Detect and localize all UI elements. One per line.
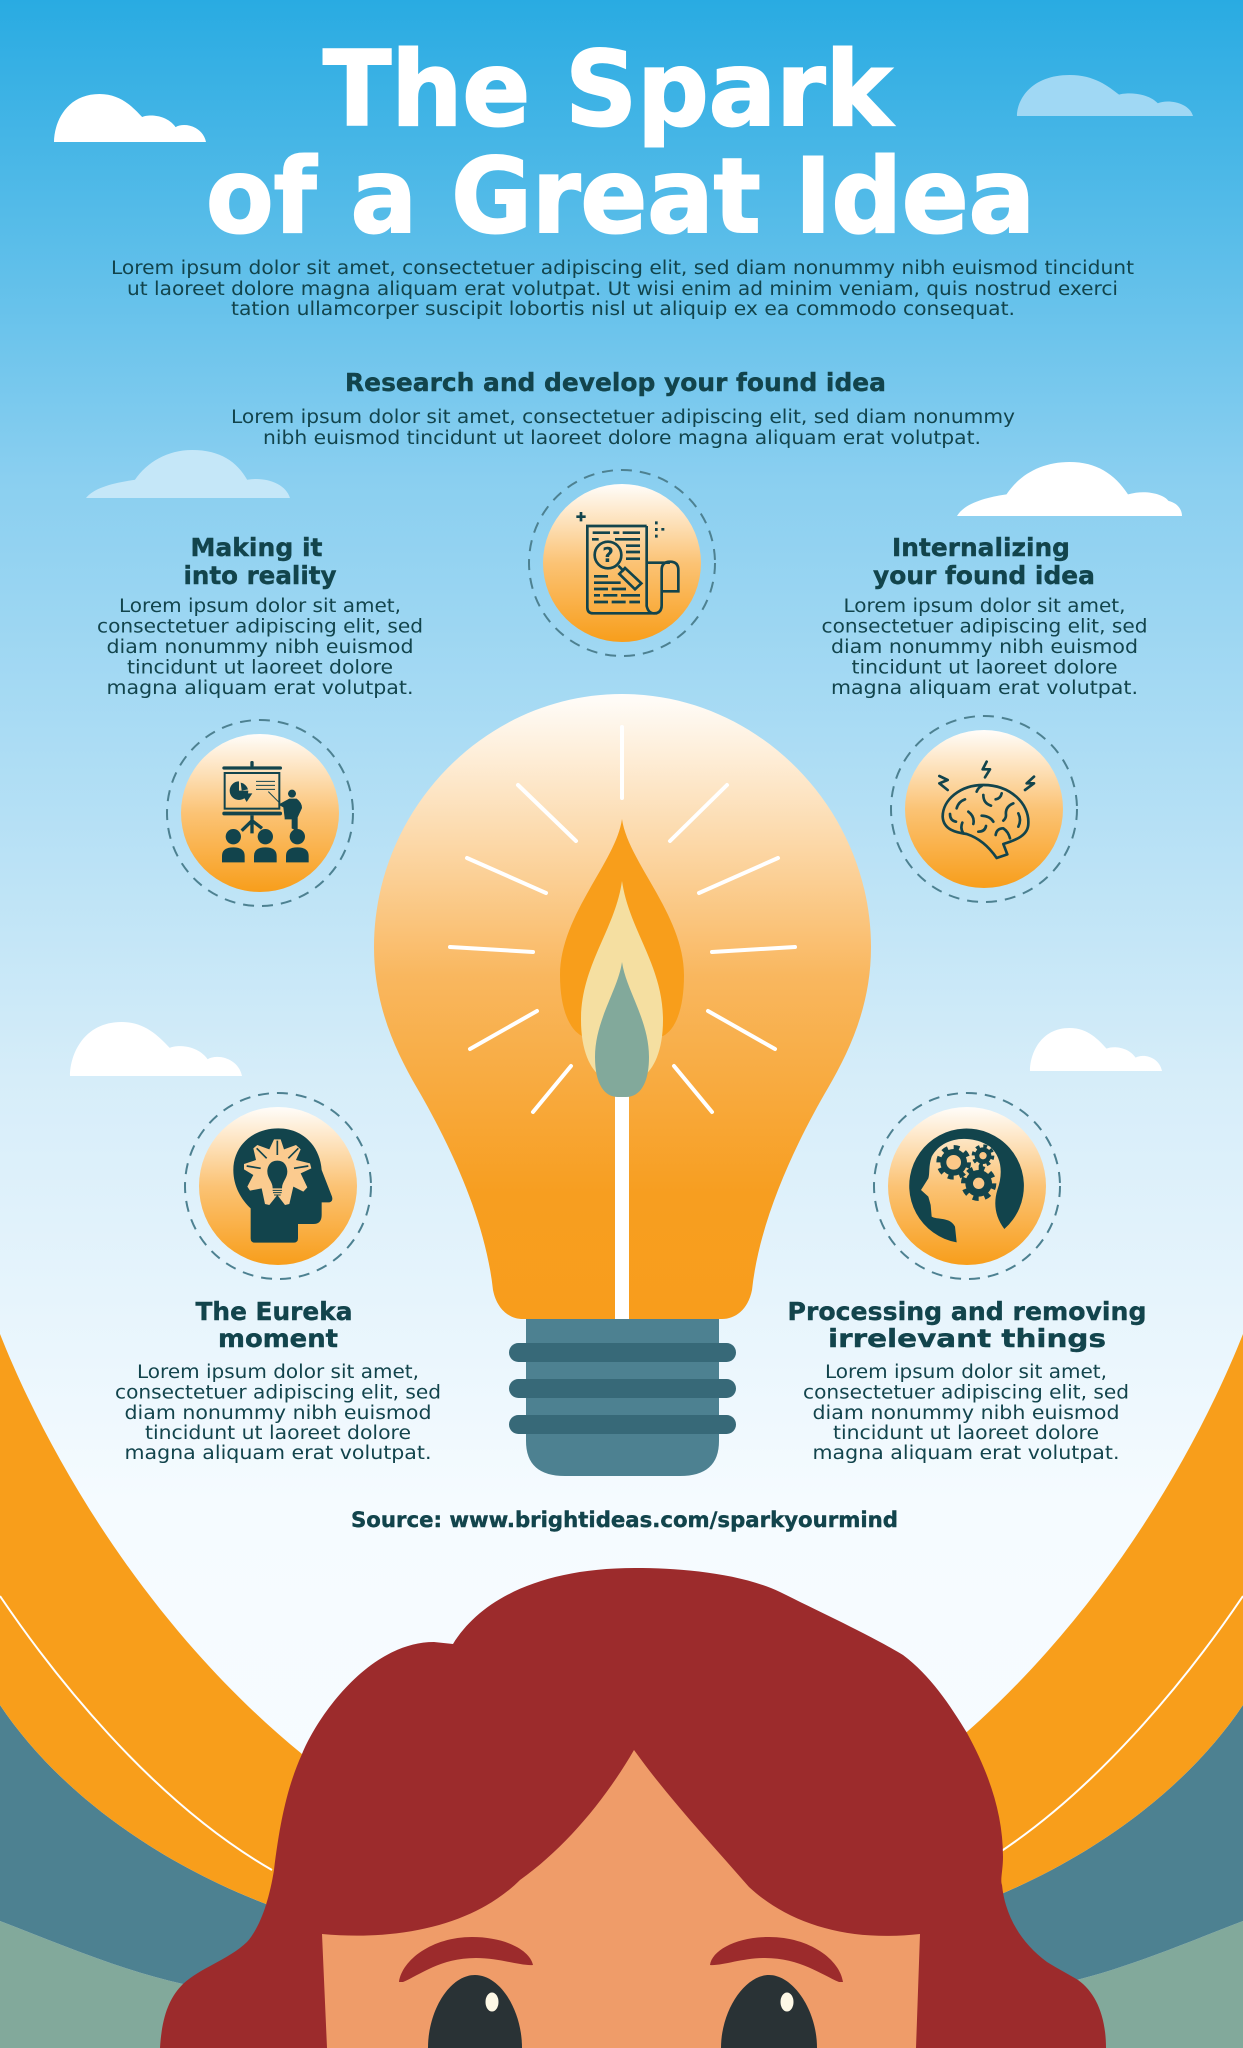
left eye xyxy=(428,1975,522,2048)
eye highlights xyxy=(486,1992,794,2012)
title: of a Great Idea xyxy=(206,137,1035,257)
text: research: Lorem ipsum dolor sit amet, consectetuer adipiscing elit, sed diam nonummy xyxy=(231,407,1015,428)
teal arch xyxy=(0,1705,1243,2000)
source line: Source: www.brightideas.com/sparkyourmind xyxy=(351,1508,898,1532)
title xyxy=(206,30,1035,257)
text: internalizing: consectetuer adipiscing elit, sed xyxy=(822,616,1148,638)
cloud lower left xyxy=(70,1022,242,1076)
rainbow arches behind the head xyxy=(0,1334,1243,2048)
intro text: ut laoreet dolore magna aliquam erat volutpat. Ut wisi enim ad minim veniam, quis nostrud exerci xyxy=(127,279,1118,300)
heading: eureka: The Eureka xyxy=(196,1297,352,1326)
text: making it into reality xyxy=(97,596,423,699)
icon: research document in circle: ? xyxy=(602,543,614,567)
text: eureka: magna aliquam erat volutpat. xyxy=(124,1443,432,1464)
text: internalizing xyxy=(822,596,1148,699)
cloud middle right xyxy=(957,462,1182,516)
bulb screw base xyxy=(526,1310,719,1476)
heading: processing: irrelevant things xyxy=(828,1324,1106,1353)
flame xyxy=(560,819,684,1097)
light bulb xyxy=(374,694,871,1476)
text: making it into reality: diam nonummy nibh euismod xyxy=(106,637,414,658)
heading: research: Research and develop your found idea xyxy=(345,368,886,397)
text: processing: consectetuer adipiscing elit, sed xyxy=(803,1382,1129,1404)
heading: internalizing: Internalizing xyxy=(892,533,1070,562)
orange arch xyxy=(0,1334,1243,1930)
heading: eureka: moment xyxy=(218,1324,338,1353)
text: eureka: tincidunt ut laoreet dolore xyxy=(145,1423,411,1444)
cloud middle left xyxy=(86,450,290,498)
green outer ground xyxy=(0,1921,1243,2048)
text: processing xyxy=(803,1362,1129,1464)
text: internalizing: tincidunt ut laoreet dolore xyxy=(852,658,1118,678)
heading: making it into reality xyxy=(184,533,337,590)
intro text: Lorem ipsum dolor sit amet, consectetuer adipiscing elit, sed diam nonummy nibh euismod tincidunt xyxy=(111,258,1134,279)
text: eureka: diam nonummy nibh euismod xyxy=(124,1403,432,1424)
icon: research document in circle xyxy=(529,470,715,656)
text: making it into reality: magna aliquam erat volutpat. xyxy=(106,678,414,699)
text: research xyxy=(231,407,1015,449)
cloud top left xyxy=(54,94,206,142)
left eyebrow xyxy=(399,1937,533,1982)
text: eureka: consectetuer adipiscing elit, sed xyxy=(115,1382,441,1404)
text: internalizing: diam nonummy nibh euismod xyxy=(831,637,1138,658)
match stick xyxy=(615,1095,629,1319)
text: processing: Lorem ipsum dolor sit amet, xyxy=(825,1362,1107,1383)
light rays xyxy=(450,727,795,1112)
cloud top right xyxy=(1017,75,1193,116)
text: processing: diam nonummy nibh euismod xyxy=(812,1403,1120,1424)
face xyxy=(322,1750,920,2048)
heading: internalizing: your found idea xyxy=(873,561,1095,590)
text: eureka xyxy=(115,1362,441,1464)
text: making it into reality: consectetuer adipiscing elit, sed xyxy=(97,616,423,638)
text: internalizing: Lorem ipsum dolor sit amet, xyxy=(844,596,1126,617)
hair xyxy=(160,1568,1106,2048)
heading: processing: Processing and removing xyxy=(788,1297,1146,1326)
white arch line xyxy=(0,1596,1243,1870)
character: head with red hair xyxy=(160,1568,1106,2048)
text: making it into reality: tincidunt ut laoreet dolore xyxy=(127,658,393,678)
text: research: nibh euismod tincidunt ut laoreet dolore magna aliquam erat volutpat. xyxy=(263,428,981,449)
heading: internalizing xyxy=(873,533,1095,590)
intro text: tation ullamcorper suscipit lobortis nisl ut aliquip ex ea commodo consequat. xyxy=(231,299,1015,320)
icon: brain in circle xyxy=(891,716,1077,902)
icon: head with gears in circle xyxy=(874,1093,1060,1279)
bulb base ribs xyxy=(509,1343,736,1434)
heading: making it into reality: into reality xyxy=(184,561,337,590)
heading: processing xyxy=(788,1297,1146,1353)
text: eureka: Lorem ipsum dolor sit amet, xyxy=(137,1362,419,1383)
right eyebrow xyxy=(710,1937,843,1982)
bulb glass xyxy=(374,694,871,1319)
text: making it into reality: Lorem ipsum dolor sit amet, xyxy=(119,596,401,617)
title: The Spark xyxy=(323,30,894,150)
text: processing: magna aliquam erat volutpat. xyxy=(812,1443,1120,1464)
intro text xyxy=(111,258,1134,320)
cloud lower right xyxy=(1030,1028,1162,1071)
heading: making it into reality: Making it xyxy=(190,533,323,562)
heading: eureka xyxy=(196,1297,352,1353)
right eye xyxy=(721,1975,817,2048)
icon: presentation in circle xyxy=(167,720,353,906)
text: processing: tincidunt ut laoreet dolore xyxy=(833,1423,1099,1444)
text: internalizing: magna aliquam erat volutpat. xyxy=(831,678,1138,699)
icon: eureka head with bulb in circle xyxy=(185,1093,371,1279)
